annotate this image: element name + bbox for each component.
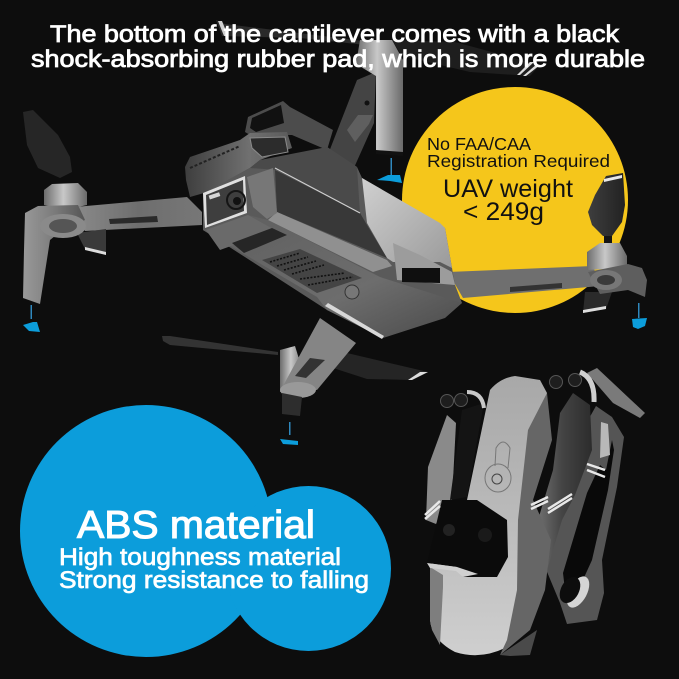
hinge: right arm [393,243,455,285]
motor: left [44,183,87,210]
rear sensor [250,105,284,132]
main drone [23,20,647,445]
corner column [247,168,277,219]
yellow badge text: No FAA/CAA [427,134,531,154]
light strip [268,212,392,272]
yellow circle badge [402,87,628,313]
motor: folded [562,573,594,611]
light bracket [600,422,610,458]
dark side panel [275,170,387,258]
arm bar: left [75,197,202,231]
nose vents [190,146,240,168]
rear arm [327,72,376,170]
slot: lower [295,358,325,378]
hub: right [588,264,647,297]
title: The bottom of the cantilever comes with a black [50,21,620,48]
rear propeller [216,20,540,76]
blue badge text: High toughness material [59,544,341,571]
vent grille [262,249,362,293]
right arm [448,173,647,313]
motor center [555,573,585,607]
underside plate [203,215,462,338]
propeller: left [23,110,72,178]
left rotors [440,392,484,408]
dark arm [450,403,484,500]
rubber pad: lower leg [280,422,298,445]
light panel [362,178,452,268]
nose sensor [250,137,288,157]
left blade [426,415,456,524]
dark inner blade [563,440,614,590]
yellow badge text: < 249g [463,198,544,226]
blue badge text [59,504,369,594]
right rotors [550,372,594,402]
yellow badge text: Registration Required [427,151,610,171]
motor: lower [280,346,304,392]
drone body [185,101,462,339]
rubber pad: rear leg [377,158,402,183]
title: shock-absorbing rubber pad, which is more durable [31,46,645,73]
left arm [23,110,202,304]
yellow badge text [427,134,610,226]
lower arm [162,318,428,416]
body top [250,147,360,214]
propeller blades: lower [162,336,428,380]
blue circle badge [20,405,391,657]
flap: left [77,229,106,255]
rubber pad: right leg [632,303,647,329]
rubber pad: left leg [23,305,40,332]
propeller: right [588,173,625,246]
white stripes [425,464,605,519]
arm bar: lower [283,318,356,390]
rear leg [356,40,403,156]
blue badge text: ABS material [77,504,315,547]
folded drone [425,368,645,656]
hub: lower [280,382,316,398]
power button [485,442,511,492]
yellow badge text: UAV weight [443,175,573,203]
dark stripe [232,228,287,253]
slot: right [510,283,562,292]
flap: right [583,292,612,313]
body base [203,147,462,338]
side edge [275,168,360,213]
nose shell [185,132,292,197]
shell [430,376,547,655]
slot: left [109,216,158,224]
shell lower left strip [430,567,443,645]
bar: right [448,266,600,298]
leg: left [23,205,85,304]
hinge shadow [402,268,440,283]
screws on plate [345,285,359,299]
under camera panel [206,215,275,250]
hub: left [40,214,86,238]
top-right arm [587,368,645,418]
lower frame [500,630,537,656]
rear blade [532,393,592,567]
leg: lower [282,393,302,416]
title [31,21,645,73]
shell side [500,393,552,655]
rear shell [245,101,333,150]
gimbal camera [427,500,508,577]
camera block [203,176,247,228]
outer frame [545,406,624,624]
plate edge [325,303,384,339]
motor: right [587,243,627,270]
blue badge text: Strong resistance to falling [59,567,369,594]
